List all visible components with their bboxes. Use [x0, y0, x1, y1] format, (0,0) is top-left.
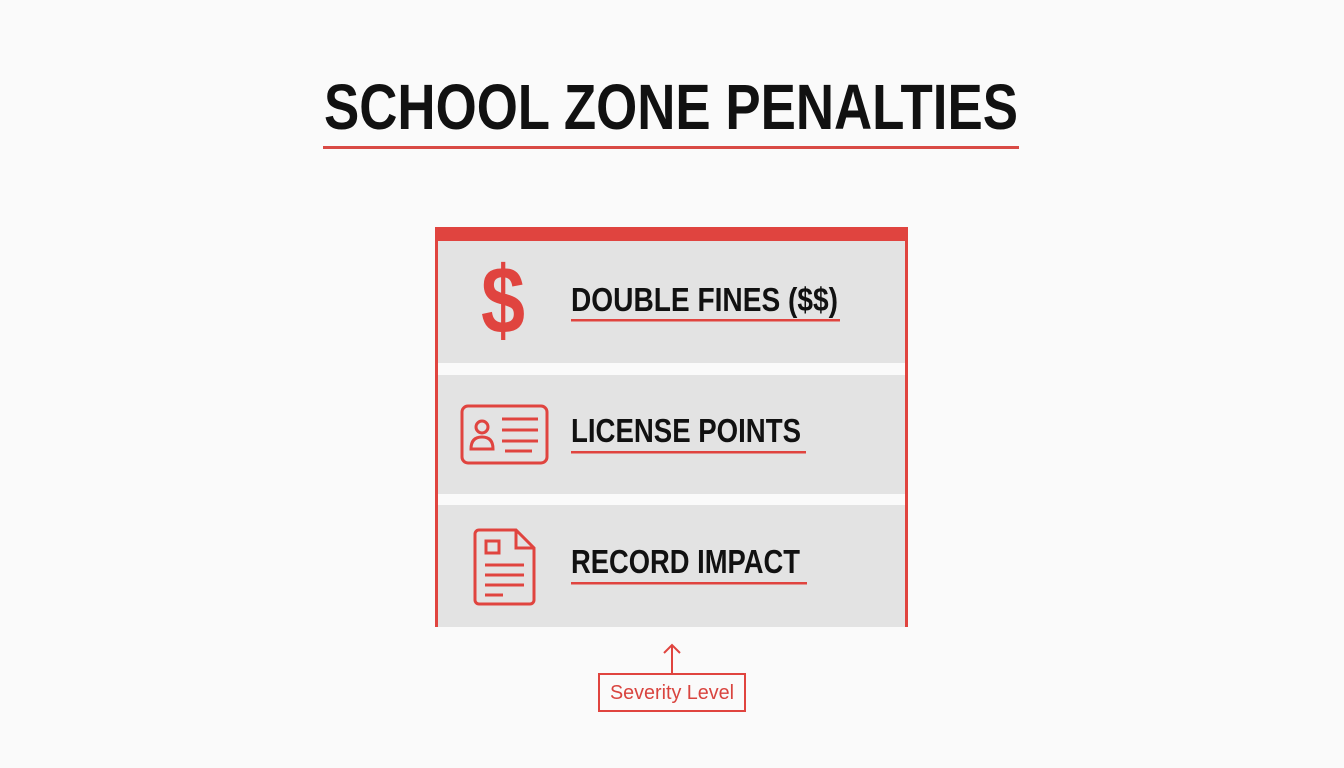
panel: penalties list	[435, 227, 908, 627]
icon: document	[475, 530, 534, 604]
row: license points	[438, 375, 905, 494]
row: double fines	[438, 241, 905, 363]
arrow: up to panel	[664, 645, 680, 673]
title: SCHOOL ZONE PENALTIES	[324, 71, 1018, 143]
icon: license card	[462, 406, 547, 463]
callout: severity level: Severity Level	[610, 682, 734, 704]
callout: severity level	[599, 674, 745, 711]
icon: dollar sign: $	[481, 247, 525, 354]
row: record impact	[438, 505, 905, 627]
row: record impact: RECORD IMPACT	[571, 543, 800, 580]
row: license points: LICENSE POINTS	[571, 412, 801, 449]
row: double fines: DOUBLE FINES ($$)	[571, 281, 838, 318]
